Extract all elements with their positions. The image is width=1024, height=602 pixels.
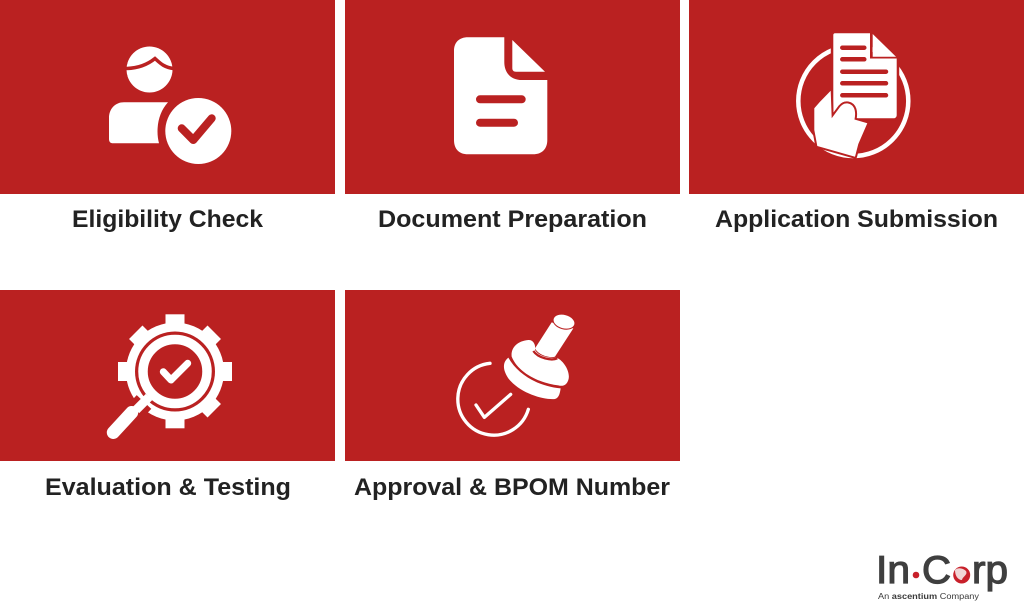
icon: gear with magnifier and check [113,314,232,432]
logo: InCorp [876,549,1008,601]
icon: hand holding document in a ring [798,33,908,157]
heading: Evaluation & Testing: Evaluation & Testing [45,474,291,501]
logo wordmark: In [876,549,910,592]
logo red dot [913,572,919,578]
icon: stamp with check mark [458,312,576,435]
heading: Approval & BPOM Number: Approval & BPOM Number [354,474,670,501]
panel: Evaluation & Testing [0,290,335,501]
icon: document [454,37,547,154]
heading: Eligibility Check: Eligibility Check [72,206,264,233]
logo wordmark: C [922,549,951,592]
heading: Application Submission: Application Submission [715,206,998,233]
panel: Approval & BPOM Number [345,290,680,501]
icon: person with check mark [109,46,231,164]
panel: Eligibility Check [0,0,335,233]
panel: Application Submission [689,0,1024,233]
logo wordmark [876,549,1008,592]
logo tagline: An ascentium Company [878,592,979,601]
logo wordmark: rp [972,549,1008,592]
heading: Document Preparation: Document Preparation [378,206,647,233]
logo globe [953,566,970,584]
panel: Document Preparation [345,0,680,233]
